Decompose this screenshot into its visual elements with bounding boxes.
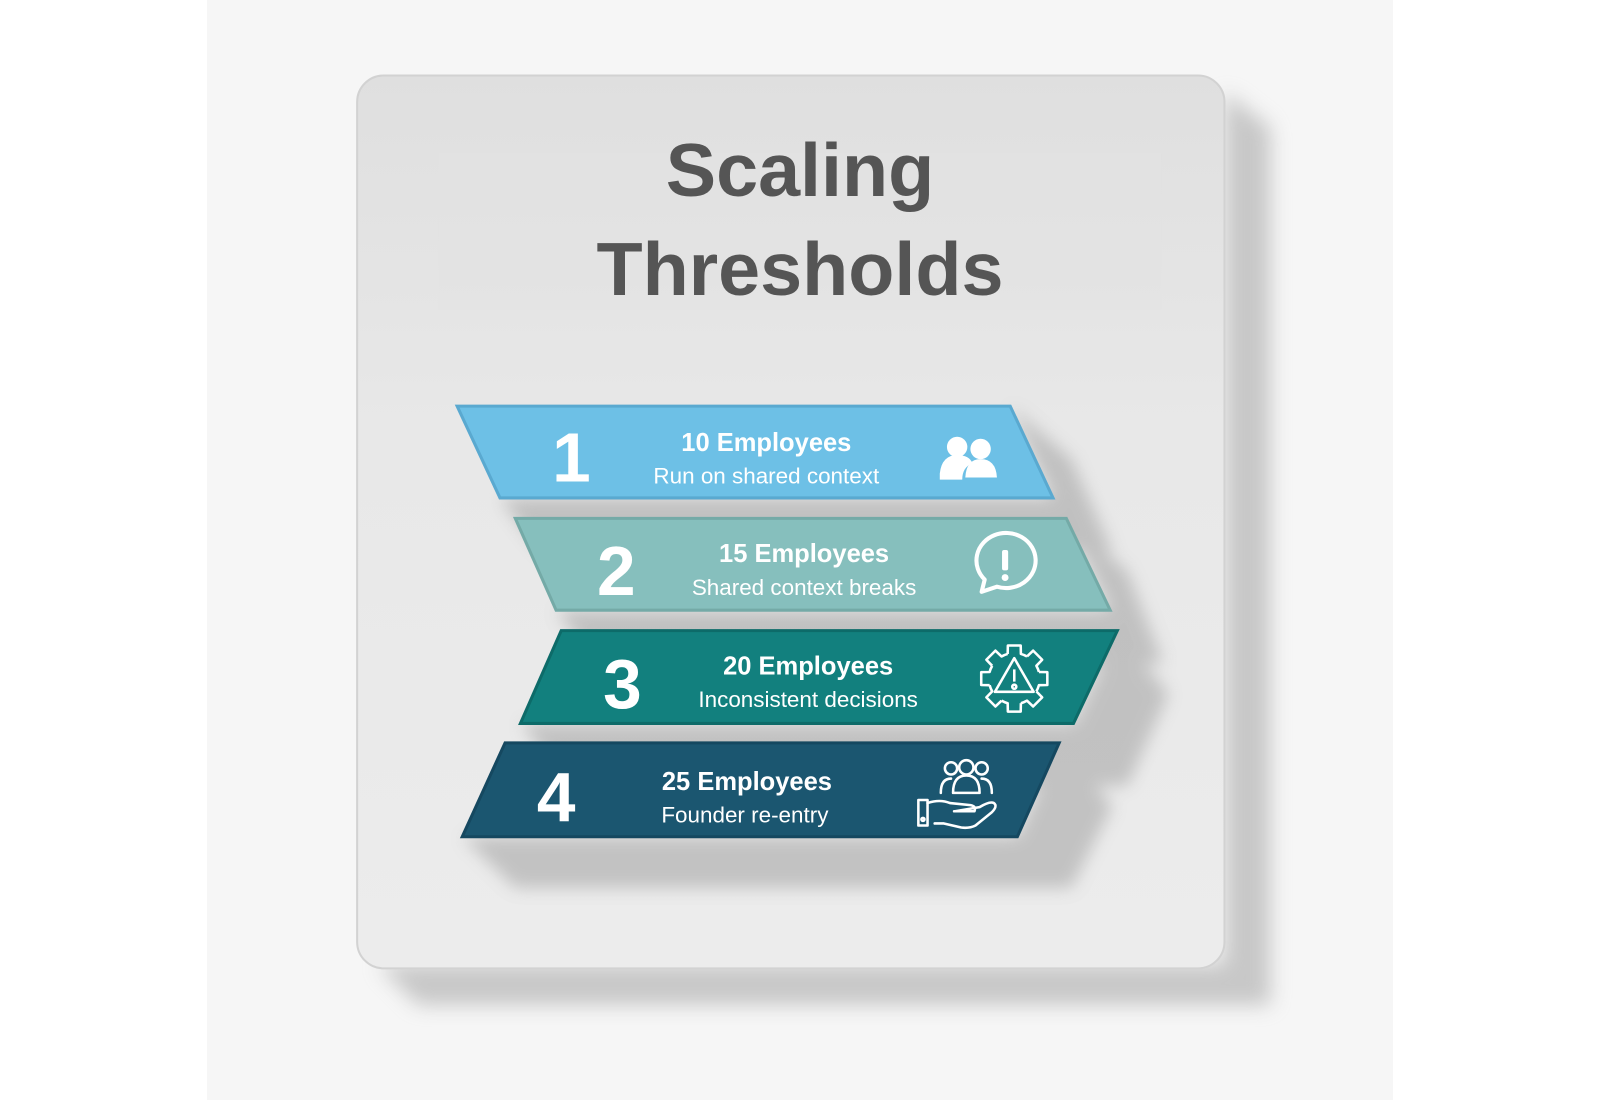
number 3: 3 xyxy=(603,645,642,723)
text 1: 10 Employees xyxy=(681,429,851,457)
number 4: 4 xyxy=(537,758,576,836)
text 3 xyxy=(698,652,918,712)
icon: gear warning xyxy=(981,646,1047,712)
band shadows xyxy=(462,406,1168,888)
number 1: 1 xyxy=(552,419,591,497)
text 1: Run on shared context xyxy=(653,464,880,489)
number 2: 2 xyxy=(597,532,636,610)
card shadow xyxy=(378,92,1270,1005)
title: Scaling xyxy=(666,128,934,212)
band 2 xyxy=(515,518,1110,610)
text 4: Founder re-entry xyxy=(661,802,829,827)
title xyxy=(439,128,1161,311)
card xyxy=(357,76,1224,968)
text 2: 15 Employees xyxy=(719,540,889,568)
icon: speech bubble xyxy=(976,533,1036,592)
band 3 xyxy=(520,631,1117,723)
text 3: 20 Employees xyxy=(723,652,893,680)
band 1 xyxy=(457,406,1053,498)
text 4 xyxy=(661,768,832,827)
title: Thresholds xyxy=(597,227,1003,311)
band 4 xyxy=(462,743,1059,837)
text 2 xyxy=(692,540,916,600)
icon: people xyxy=(940,437,997,480)
text 4: 25 Employees xyxy=(662,768,832,796)
text 1 xyxy=(653,429,880,489)
text 2: Shared context breaks xyxy=(692,575,916,600)
text 3: Inconsistent decisions xyxy=(698,687,918,712)
background panel xyxy=(207,0,1393,1100)
icon: hand with people xyxy=(918,760,996,828)
